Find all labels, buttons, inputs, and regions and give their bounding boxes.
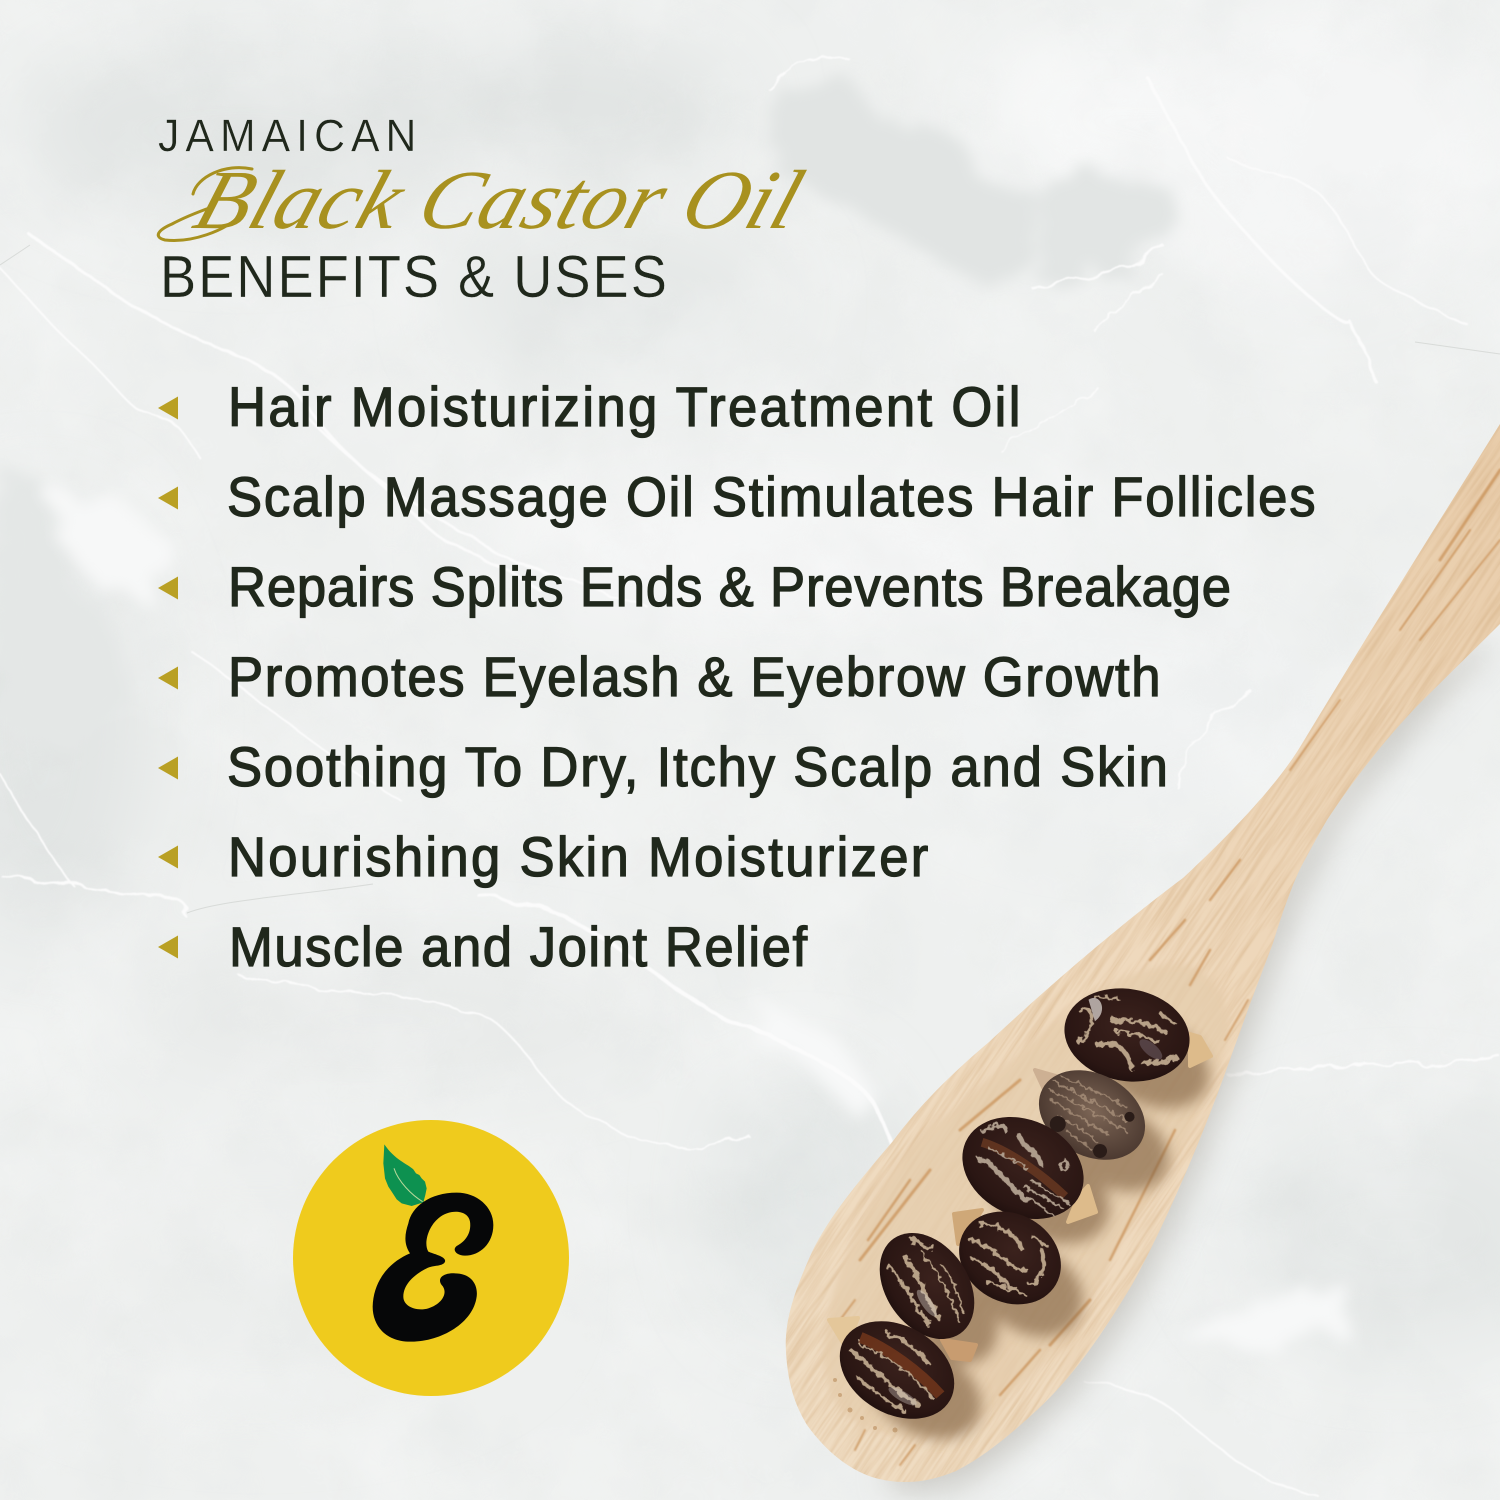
list item 6: Nourishing Skin Moisturizer <box>228 826 928 888</box>
seed caps <box>829 1034 1211 1360</box>
list item 2: Scalp Massage Oil Stimulates Hair Follicles <box>227 466 1316 528</box>
wood grain texture <box>786 424 1500 1482</box>
heading line: Black Castor Oil: Black Castor Oil <box>184 153 814 247</box>
seed 4 <box>942 1193 1078 1323</box>
benefits list <box>158 376 1316 978</box>
spoon bowl hollow <box>824 964 1229 1439</box>
logo letter and leaf <box>373 1144 493 1342</box>
wood crumbs <box>833 1378 898 1432</box>
fine dark veins <box>0 245 1500 913</box>
mottled grey marble patches <box>0 80 1170 750</box>
wooden spoon with castor seeds <box>786 424 1500 1491</box>
spoon body <box>786 424 1500 1482</box>
seed 2 <box>1023 1053 1161 1177</box>
list item 4: Promotes Eyelash & Eyebrow Growth <box>228 646 1160 708</box>
seed 5 <box>860 1215 994 1357</box>
heading <box>158 111 814 311</box>
white marble patches <box>50 490 1350 1350</box>
heading line: Jamaican: JAMAICAN <box>158 111 416 161</box>
seed 3 <box>946 1098 1100 1238</box>
brand logo <box>293 1120 569 1396</box>
list item 5: Soothing To Dry, Itchy Scalp and Skin <box>227 736 1168 798</box>
seed 6 <box>822 1301 972 1439</box>
list item 7: Muscle and Joint Relief <box>229 916 808 978</box>
list item 1: Hair Moisturizing Treatment Oil <box>228 376 1020 438</box>
list item 3: Repairs Splits Ends & Prevents Breakage <box>228 556 1231 618</box>
logo yellow circle <box>293 1120 569 1396</box>
seed 1 <box>1057 979 1197 1091</box>
seed shadows <box>852 998 1224 1458</box>
heading line: Benefits and Uses: BENEFITS & USES <box>160 245 667 311</box>
spoon cast shadow <box>887 636 1500 1491</box>
